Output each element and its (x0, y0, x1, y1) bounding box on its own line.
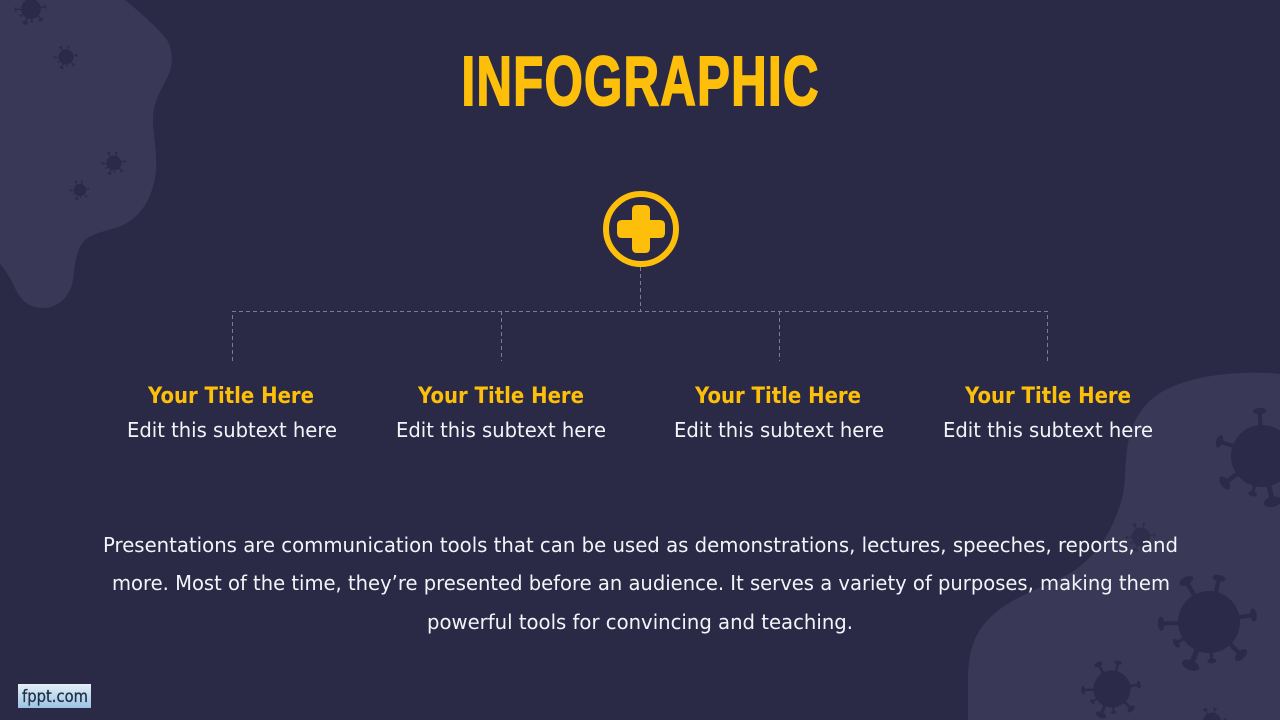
body paragraph: more. Most of the time, they’re presented before an audience. It serves a variety of purposes, making them (112, 571, 1170, 595)
column 2: Your Title Here (417, 384, 584, 409)
column 1: Your Title Here (147, 384, 314, 409)
blob: top-left with viruses (0, 0, 172, 308)
title: INFOGRAPHIC (462, 41, 820, 120)
blob: bottom-right with viruses (968, 373, 1280, 720)
column 2: Edit this subtext here (396, 418, 606, 442)
column 4: Edit this subtext here (943, 418, 1153, 442)
connector tree (232, 267, 1048, 361)
body paragraph: powerful tools for convincing and teaching. (427, 610, 853, 634)
body paragraph (103, 533, 1178, 634)
column 3: Your Title Here (694, 384, 861, 409)
logo badge: fppt.com: fppt.com (22, 687, 88, 707)
column 3: Edit this subtext here (674, 418, 884, 442)
column 1: Edit this subtext here (127, 418, 337, 442)
column 4 (943, 384, 1153, 442)
column 3 (674, 384, 884, 442)
column 1 (127, 384, 337, 442)
column 2 (396, 384, 606, 442)
icon: medical cross in circle (606, 194, 676, 264)
column 4: Your Title Here (964, 384, 1131, 409)
body paragraph: Presentations are communication tools that can be used as demonstrations, lectures, speeches, reports, and (103, 533, 1178, 557)
